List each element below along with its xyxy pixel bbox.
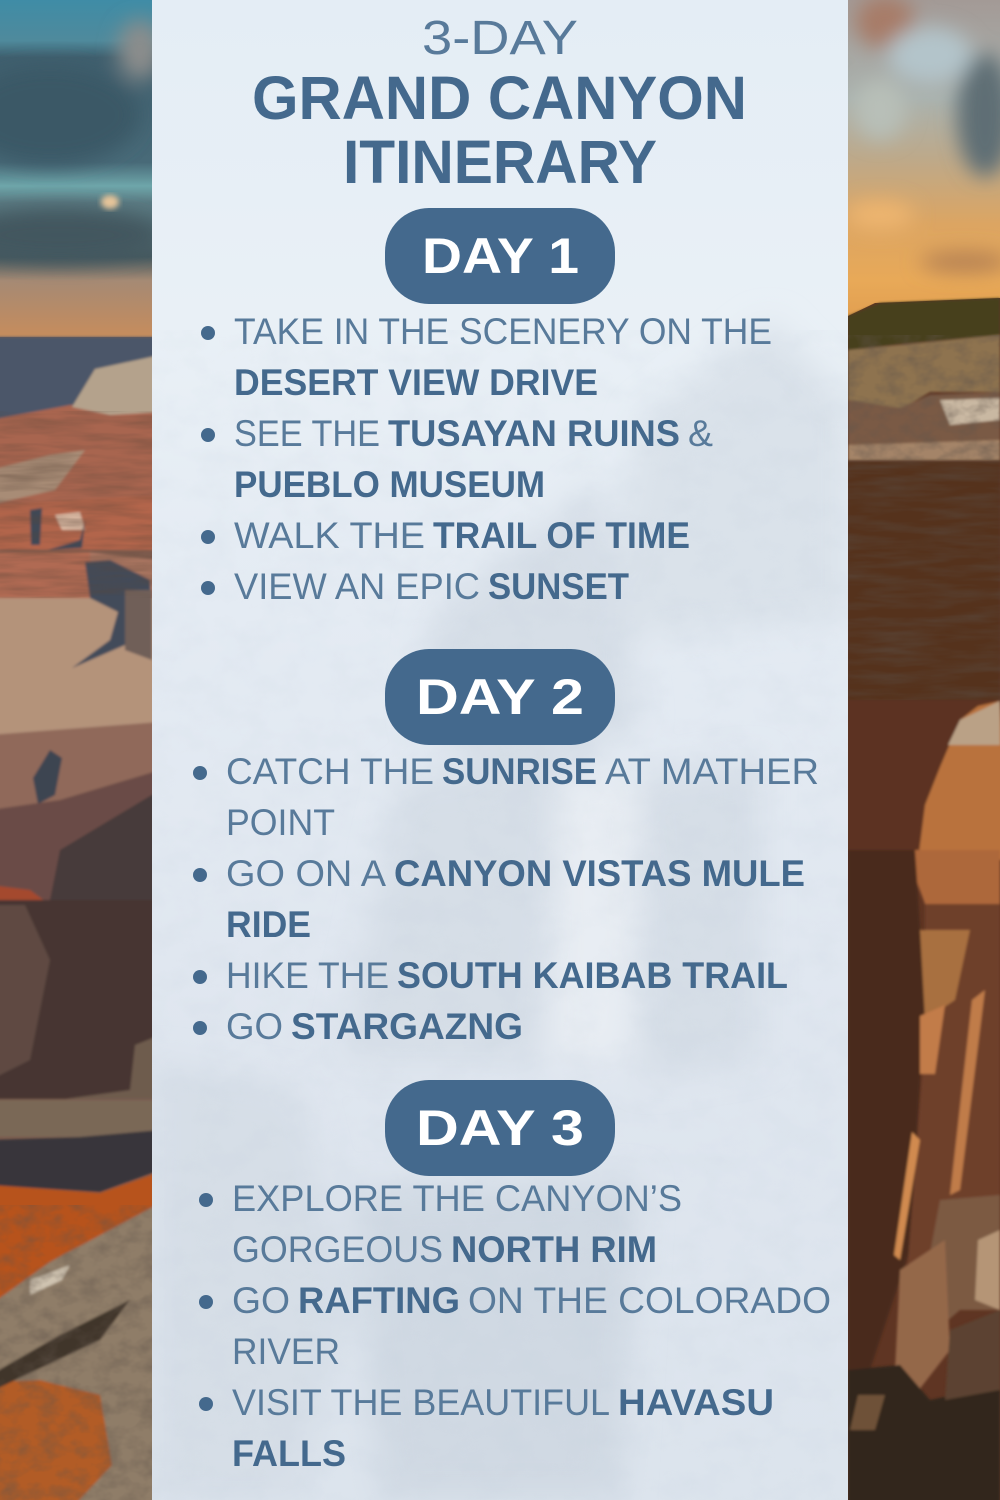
day 3 list: FALLS bbox=[232, 1433, 346, 1474]
day 1 list: TUSAYAN RUINS bbox=[388, 413, 680, 454]
day 3 list: RAFTING bbox=[298, 1280, 460, 1321]
day 1 list: WALK THE bbox=[234, 515, 425, 556]
day 2 badge bbox=[385, 649, 615, 745]
day 2 list: CATCH THE bbox=[226, 751, 434, 792]
day 3 list: GORGEOUS bbox=[232, 1229, 443, 1270]
title line: 3-DAY: 3-DAY bbox=[422, 12, 578, 65]
left photo strip: canyon at dusk bbox=[0, 0, 162, 1500]
day 1 list: SEE THE bbox=[234, 413, 380, 454]
translucent centre panel bbox=[152, 0, 848, 1500]
day 2 badge: DAY 2 bbox=[416, 669, 584, 725]
day 2 list: SUNRISE bbox=[442, 751, 597, 792]
day 1 list: DESERT VIEW DRIVE bbox=[234, 362, 598, 403]
day 2 list: RIDE bbox=[226, 904, 311, 945]
day 3 list: ON THE COLORADO bbox=[468, 1280, 831, 1321]
day 2 list: CANYON VISTAS MULE bbox=[394, 853, 805, 894]
day 2 list: AT MATHER bbox=[605, 751, 819, 792]
day 2 list: GO ON A bbox=[226, 853, 386, 894]
right photo strip: sunset cliff bbox=[846, 0, 1000, 1500]
day 3 list bbox=[199, 1178, 831, 1474]
day 1 list: TRAIL OF TIME bbox=[433, 515, 690, 556]
day 3 list: NORTH RIM bbox=[451, 1229, 657, 1270]
day 3 list: EXPLORE THE CANYON’S bbox=[232, 1178, 682, 1219]
day 1 list: PUEBLO MUSEUM bbox=[234, 464, 545, 505]
day 2 list: STARGAZNG bbox=[291, 1006, 523, 1047]
day 2 list bbox=[193, 751, 819, 1047]
day 2 list: HIKE THE bbox=[226, 955, 389, 996]
title line: ITINERARY: ITINERARY bbox=[343, 128, 657, 196]
day 1 list bbox=[201, 311, 772, 607]
day 3 list: RIVER bbox=[232, 1331, 340, 1372]
day 1 list: VIEW AN EPIC bbox=[234, 566, 480, 607]
title bbox=[252, 12, 747, 196]
day 1 badge bbox=[385, 208, 615, 304]
day 3 badge: DAY 3 bbox=[416, 1100, 584, 1156]
day 3 list: VISIT THE BEAUTIFUL bbox=[232, 1382, 610, 1423]
day 3 badge bbox=[385, 1080, 615, 1176]
day 2 list: SOUTH KAIBAB TRAIL bbox=[397, 955, 788, 996]
title line: GRAND CANYON: GRAND CANYON bbox=[252, 64, 747, 132]
day 1 list: TAKE IN THE SCENERY ON THE bbox=[234, 311, 772, 352]
day 1 list: SUNSET bbox=[488, 566, 629, 607]
day 3 list: HAVASU bbox=[618, 1382, 774, 1423]
day 2 list: GO bbox=[226, 1006, 283, 1047]
day 1 list: & bbox=[688, 413, 713, 454]
day 2 list: POINT bbox=[226, 802, 335, 843]
day 3 list: GO bbox=[232, 1280, 290, 1321]
day 1 badge: DAY 1 bbox=[422, 228, 579, 284]
